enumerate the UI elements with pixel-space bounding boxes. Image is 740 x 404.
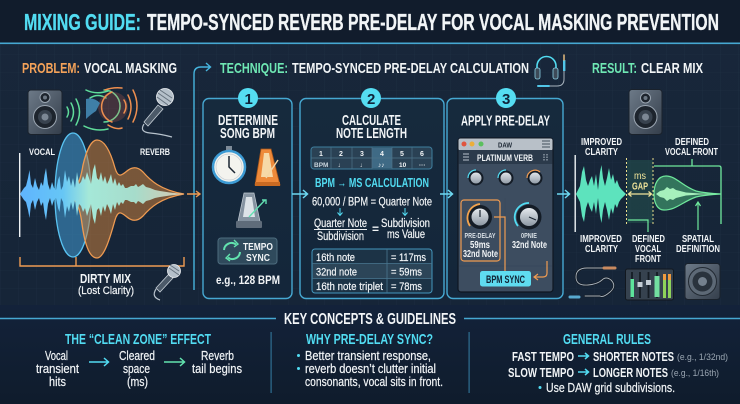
heading: DETERMINE (218, 112, 278, 129)
panel: step 3 apply pre-delay (447, 88, 563, 298)
labels: defined vocal front bottom: VOCAL (635, 244, 661, 255)
icon: microphone top (142, 88, 174, 137)
column: general rules: (e.g., 1/16th) (671, 368, 719, 379)
badge 1 (238, 88, 258, 108)
results table: 16th note triplet (316, 281, 383, 293)
note grid table (311, 147, 432, 169)
labels: defined vocal front bottom: DEFINED (632, 234, 665, 245)
panel: step 2 calculate note length: Subdivision (317, 231, 364, 243)
second knob control: 32nd Note (512, 240, 547, 251)
connector lines (494, 217, 547, 280)
pre-delay control: 59ms (470, 240, 490, 251)
column: general rules: SLOW TEMPO (508, 365, 574, 380)
plugin window (458, 138, 553, 292)
column: clean zone effect: hits (49, 375, 66, 389)
column: clean zone effect: Reverb (201, 349, 234, 363)
green reverb tail (654, 176, 721, 210)
tempo sync box: TEMPO (243, 241, 273, 253)
column: clean zone effect: Cleared (119, 349, 155, 363)
note grid table: 5 (400, 151, 404, 158)
panel: step 2 calculate note length: Subdivision (381, 218, 430, 230)
icon: grey metronome (236, 193, 266, 228)
heading: result: CLEAR MIX (641, 60, 703, 77)
column: why pre-delay sync (297, 331, 443, 389)
column: general rules: (e.g., 1/32nd) (677, 352, 728, 363)
results table: 32nd note (316, 266, 357, 278)
arrow: spatial definition (696, 202, 700, 230)
heading: problem (22, 60, 177, 77)
panel: key concepts and guidelines (0, 305, 740, 404)
title bar (0, 0, 740, 44)
title bar: MIXING GUIDE: (24, 9, 141, 35)
icon: masking sound waves (67, 88, 137, 130)
label: dirty mix: (Lost Clarity) (78, 285, 134, 297)
labels: improved clarity bottom: CLARITY (585, 244, 618, 255)
labels: improved clarity top (581, 137, 622, 158)
ms gap zone (626, 158, 653, 224)
plugin window: DAW (498, 140, 513, 150)
small knobs (470, 172, 542, 184)
labels: defined vocal front top: VOCAL FRONT (665, 147, 718, 158)
arrow: step 2 to step 3 (440, 190, 452, 198)
column: clean zone effect: space (123, 362, 150, 376)
panel: step 2 calculate note length: Quarter Note (314, 218, 367, 230)
note grid table: 10 (399, 162, 407, 169)
icon: speaker bottom right (685, 264, 720, 300)
icon: microphone bottom (154, 264, 180, 300)
second knob control (512, 203, 547, 251)
column: general rules: FAST TEMPO (512, 349, 574, 364)
formula: 60,000 / BPM = Quarter Note (312, 196, 432, 208)
labels: improved clarity top: CLARITY (585, 147, 618, 158)
icon: speaker left (28, 90, 62, 134)
bracket: dirty mix (20, 257, 184, 266)
blue masking lobe (55, 133, 91, 257)
results table: = 117ms (391, 252, 426, 264)
column: clean zone effect (36, 331, 242, 389)
column: general rules: LONGER NOTES (593, 365, 668, 380)
arrow: problem to technique (194, 63, 210, 290)
orange reverb envelope (62, 140, 184, 258)
labels: defined vocal front top (665, 137, 718, 158)
pre-delay control (461, 200, 500, 261)
note grid table: ··· (419, 162, 426, 169)
chart: clear mix waveform (574, 155, 721, 232)
column: why pre-delay sync: reverb doesn’t clutter initial (305, 362, 436, 376)
note grid table: 2 (339, 151, 343, 158)
ms gap zone: GAP (632, 180, 648, 192)
column: why pre-delay sync: Better transient response, (305, 349, 431, 363)
column: clean zone effect: (ms) (127, 375, 148, 389)
section heading: KEY CONCEPTS & GUIDELINES (284, 311, 456, 328)
panel: step 1 determine song BPM: SONG BPM (220, 125, 275, 142)
column: why pre-delay sync: WHY PRE-DELAY SYNC? (306, 331, 433, 348)
arrow: step 1 to step 2 (292, 190, 308, 198)
heading: technique: TECHNIQUE: (220, 60, 288, 77)
panel: step 2 calculate note length: NOTE LENGTH (336, 125, 407, 142)
labels: improved clarity bottom: IMPROVED (580, 234, 622, 245)
column: general rules (508, 331, 728, 395)
green vocal waveform (576, 165, 626, 194)
heading: problem: VOCAL MASKING (84, 60, 177, 77)
bracket: gap to defined vocal front (628, 220, 648, 232)
panel: step 2 calculate note length: = (372, 222, 379, 236)
note grid table: ♩ (360, 162, 366, 169)
tempo sync box (218, 238, 277, 264)
column: why pre-delay sync: consonants, vocal sits in front. (305, 375, 443, 389)
note grid table: ♪♪ (378, 162, 384, 169)
badge 3 (496, 88, 516, 108)
column: general rules: GENERAL RULES (563, 331, 651, 348)
icon: headphones (535, 55, 565, 86)
column: clean zone effect: tail begins (192, 362, 242, 376)
note grid table: ♩ (338, 162, 344, 169)
second knob control: 0PNIE (521, 233, 537, 240)
label: dirty mix: DIRTY MIX (80, 271, 131, 286)
arrow: step 3 to result (557, 190, 570, 198)
BPM sync button (480, 271, 531, 286)
note grid table: 4 (380, 151, 384, 158)
tempo sync box: SYNC (246, 252, 270, 264)
pre-delay control: 32nd Note (463, 249, 498, 260)
heading: technique: TEMPO-SYNCED PRE-DELAY CALCULATION (292, 60, 529, 77)
badge 2 (361, 88, 381, 108)
badge 2: 2 (367, 91, 375, 108)
note grid table: 1 (319, 151, 323, 158)
panel: step 1 determine song BPM (203, 88, 292, 298)
column: clean zone effect: Vocal (45, 349, 68, 363)
chart: dirty mix waveform (19, 133, 184, 258)
arrow: problem to step 1 (187, 191, 200, 197)
plugin window: PLATINUM VERB (477, 153, 533, 164)
labels: improved clarity top: IMPROVED (581, 137, 622, 148)
heading: CALCULATE (342, 112, 401, 129)
results table (312, 249, 432, 293)
ms gap zone: ms (634, 170, 646, 182)
heading: problem: PROBLEM: (22, 60, 80, 77)
labels: spatial definition: SPATIAL (682, 234, 714, 245)
panel: step 2 calculate note length: ms Value (387, 229, 425, 241)
heading: result: RESULT: (592, 60, 637, 77)
column: clean zone effect: THE “CLEAN ZONE” EFFECT (65, 331, 211, 348)
example BPM: e.g., 128 BPM (216, 273, 280, 287)
icon: speaker top right (629, 90, 662, 134)
badge 3: 3 (502, 91, 510, 108)
BPM sync button: BPM SYNC (486, 274, 525, 286)
heading: APPLY PRE-DELAY (461, 112, 550, 130)
icon: orange metronome (255, 149, 280, 186)
labels: defined vocal front top: DEFINED (675, 137, 709, 148)
pre-delay control: PRE-DELAY (464, 233, 496, 240)
bracket: defined vocal front (654, 159, 721, 224)
calculation heading: BPM → MS CALCULATION (315, 176, 429, 190)
heading: result (592, 60, 703, 77)
column: general rules: SHORTER NOTES (593, 349, 674, 364)
results table: 16th note (316, 252, 355, 264)
panel: step 2 calculate note length (300, 88, 444, 298)
labels: spatial definition: DEFINITION (676, 244, 720, 255)
column: general rules: Use DAW grid subdivisions. (546, 381, 675, 395)
labels: defined vocal front bottom (632, 234, 665, 265)
vocal label: VOCAL (29, 147, 55, 158)
icon: audio cable (570, 268, 615, 297)
icon: mixer (626, 269, 674, 300)
note grid table: 6 (420, 151, 424, 158)
label: dirty mix (78, 271, 134, 297)
note grid table: BPM (314, 162, 328, 169)
column: clean zone effect: transient (36, 362, 79, 376)
reverb label: REVERB (140, 147, 170, 158)
results table: = 78ms (391, 281, 422, 293)
icon: stopwatch (213, 146, 245, 183)
labels: defined vocal front bottom: FRONT (635, 254, 661, 265)
heading: technique (220, 60, 529, 77)
note grid table: 3 (360, 151, 364, 158)
badge 1: 1 (244, 91, 253, 108)
labels: improved clarity bottom (580, 234, 622, 255)
labels: spatial definition (676, 234, 720, 255)
results table: = 59ms (391, 266, 422, 278)
